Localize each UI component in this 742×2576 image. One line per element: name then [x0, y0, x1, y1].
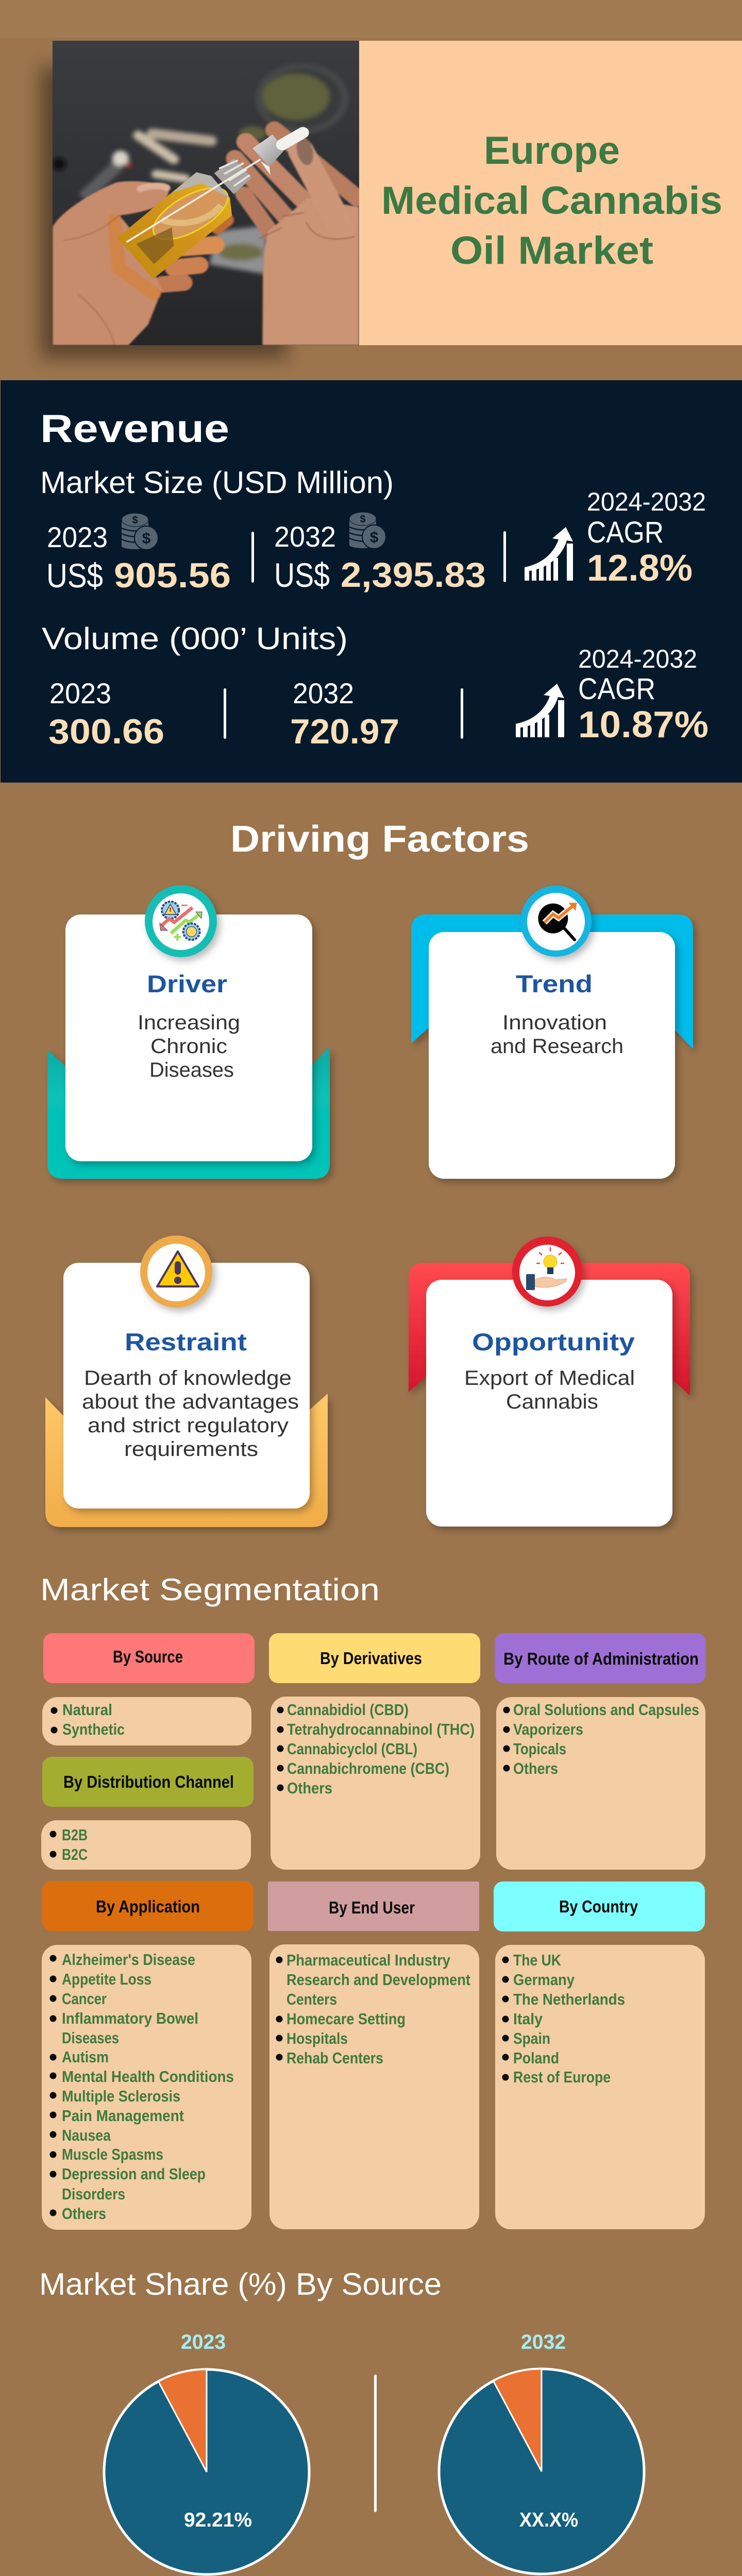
driver text: Chronic — [150, 1035, 227, 1058]
icon: growth chart 2 — [516, 684, 564, 737]
2032 volume: 2032 — [293, 677, 354, 709]
icon: coins 2023: $ — [132, 515, 138, 526]
segmentation: by application: Diseases — [62, 2029, 119, 2047]
icon: driver — [145, 885, 217, 957]
bottle fingers below — [180, 245, 215, 248]
2023 market size: US$ — [46, 556, 103, 595]
segmentation: by application: Disorders — [62, 2185, 125, 2203]
panel: driver — [47, 885, 330, 1179]
chart: source 2032 pie: 2032 — [521, 2331, 566, 2353]
2023 market size: 905.56 — [114, 556, 231, 595]
icon: coins 2032: $ — [360, 514, 366, 525]
icon: opportunity — [512, 1236, 582, 1307]
chart: source 2032 pie: XX.X% — [519, 2509, 578, 2531]
segmentation: by country: Germany — [513, 1971, 575, 1989]
trend title: Trend — [516, 970, 593, 997]
2032 market size: 2032 — [274, 520, 336, 553]
segmentation: by derivatives — [269, 1633, 480, 1870]
segmentation: by application: Depression and Sleep — [62, 2165, 206, 2183]
segmentation: by source — [42, 1633, 255, 1745]
segmentation: by application: Nausea — [62, 2126, 111, 2144]
segmentation: by end user: Hospitals — [286, 2029, 348, 2047]
segmentation: by derivatives: Tetrahydrocannabinol (THC) — [287, 1720, 475, 1738]
CAGR 1: CAGR — [587, 516, 664, 549]
segmentation: by source: Natural — [62, 1701, 112, 1719]
title panel — [359, 41, 742, 345]
segmentation: by country: Rest of Europe — [513, 2068, 611, 2086]
segmentation: by application — [42, 1881, 254, 2230]
heading: volume: Volume (000’ Units) — [42, 621, 348, 656]
trend text — [491, 1011, 623, 1058]
chart: source 2023 pie: 92.21% — [184, 2509, 252, 2531]
segmentation: by distribution channel: By Distribution Channel — [63, 1772, 234, 1791]
2032 market size — [274, 520, 486, 595]
segmentation: by country — [494, 1882, 705, 2229]
segmentation: by route of administration: Oral Solutions and Capsules — [513, 1701, 699, 1719]
restraint text: Dearth of knowledge — [84, 1367, 292, 1389]
restraint title: Restraint — [125, 1328, 247, 1355]
segmentation: by country: Poland — [513, 2049, 559, 2067]
segmentation: by application: Autism — [62, 2048, 109, 2066]
segmentation: by derivatives: Cannabidiol (CBD) — [287, 1701, 409, 1719]
segmentation: by end user: By End User — [329, 1898, 415, 1917]
icon: coins 2032 — [349, 512, 386, 549]
segmentation: by route of administration: Vaporizers — [513, 1720, 583, 1738]
title: Europe — [484, 129, 620, 173]
segmentation: by end user: Centers — [286, 1990, 337, 2008]
2032 volume: 720.97 — [290, 712, 399, 751]
segmentation: by route of administration: Topicals — [513, 1740, 566, 1758]
driver title: Driver — [147, 970, 227, 997]
segmentation: by derivatives: By Derivatives — [320, 1649, 422, 1668]
CAGR 1: 2024-2032 — [587, 487, 706, 516]
heading: driving factors: Driving Factors — [230, 819, 529, 860]
panel: restraint — [45, 1235, 328, 1527]
segmentation: by country: Spain — [513, 2029, 550, 2047]
heading: revenue: Revenue — [40, 407, 229, 451]
chart: source 2032 pie — [439, 2331, 644, 2574]
segmentation: by application: Pain Management — [62, 2107, 184, 2125]
restraint text: about the advantages — [82, 1391, 299, 1413]
CAGR 1: 12.8% — [587, 548, 693, 589]
segmentation: by derivatives: Others — [287, 1779, 332, 1797]
restraint text — [82, 1367, 299, 1461]
segmentation: by end user: Pharmaceutical Industry — [286, 1951, 451, 1969]
hero banner — [40, 41, 742, 358]
icon: coins 2023: $ — [142, 530, 151, 547]
segmentation: by application: Inflammatory Bowel — [62, 2009, 198, 2027]
segmentation: by route of administration: By Route of Administration — [503, 1649, 699, 1668]
2032 market size: 2,395.83 — [341, 555, 486, 595]
segmentation: by application: Cancer — [62, 1990, 107, 2008]
segmentation: by source: Synthetic — [62, 1720, 125, 1738]
segmentation: by distribution channel — [41, 1757, 254, 1870]
segmentation: by distribution channel: B2C — [62, 1845, 88, 1863]
panel: opportunity — [409, 1236, 690, 1527]
2023 market size: 2023 — [47, 521, 108, 553]
segmentation: by country: The Netherlands — [513, 1990, 625, 2008]
segmentation: by application: By Application — [96, 1897, 200, 1916]
icon: growth chart 1 — [525, 527, 573, 581]
segmentation: by route of administration: Others — [513, 1759, 558, 1777]
driver text: Increasing — [138, 1011, 240, 1034]
heading: market segmentation: Market Segmentation — [40, 1572, 380, 1607]
trend text: and Research — [491, 1035, 623, 1058]
2032 market size: US$ — [274, 556, 330, 594]
segmentation: by application: Others — [62, 2205, 106, 2223]
panel: trend — [411, 886, 693, 1179]
segmentation: by country: Italy — [513, 2010, 543, 2028]
trend text: Innovation — [502, 1011, 607, 1034]
heading: market size: Market Size (USD Million) — [40, 465, 394, 500]
opportunity text: Export of Medical — [464, 1367, 635, 1389]
CAGR 2: CAGR — [578, 672, 655, 706]
opportunity text: Cannabis — [506, 1391, 598, 1413]
title — [381, 129, 722, 273]
photo shadow — [40, 67, 288, 358]
restraint text: and strict regulatory — [88, 1414, 289, 1437]
segmentation: by application: Muscle Spasms — [62, 2145, 163, 2163]
segmentation: by application: Appetite Loss — [62, 1970, 151, 1988]
segmentation: by country: The UK — [513, 1951, 562, 1969]
chart: source 2023 pie — [104, 2331, 309, 2574]
title: Oil Market — [450, 229, 653, 273]
chart: source 2023 pie: 2023 — [181, 2331, 226, 2353]
segmentation: by derivatives: Cannabichromene (CBC) — [287, 1759, 449, 1777]
segmentation: by application: Mental Health Conditions — [62, 2067, 234, 2086]
right hand — [274, 130, 357, 198]
dropper — [252, 134, 285, 167]
icon: coins 2023 — [122, 513, 158, 550]
2023 volume: 2023 — [49, 677, 111, 709]
title: Medical Cannabis — [381, 179, 722, 223]
CAGR 2 — [578, 645, 709, 745]
left hand — [53, 181, 168, 345]
driver text: Diseases — [149, 1059, 234, 1081]
segmentation: by source: By Source — [113, 1647, 183, 1666]
restraint text: requirements — [124, 1438, 258, 1461]
CAGR 2: 2024-2032 — [578, 645, 697, 673]
2032 volume — [290, 677, 399, 751]
panel: revenue — [1, 380, 742, 783]
bottle — [117, 172, 232, 279]
segmentation: by end user — [268, 1882, 479, 2229]
CAGR 2: 10.87% — [578, 704, 709, 745]
2023 volume: 300.66 — [48, 712, 164, 751]
segmentation: by end user: Rehab Centers — [286, 2049, 383, 2067]
segmentation: by end user: Homecare Setting — [286, 2010, 406, 2028]
segmentation: by route of administration — [495, 1633, 706, 1870]
opportunity title: Opportunity — [472, 1328, 635, 1355]
opportunity text — [464, 1367, 635, 1413]
segmentation: by derivatives: Cannabicyclol (CBL) — [287, 1740, 417, 1758]
hero photo: hands holding oil dropper bottle — [53, 41, 359, 345]
driver text — [138, 1011, 240, 1081]
heading: market share by source: Market Share (%) By Source — [39, 2267, 442, 2301]
segmentation: by country: By Country — [559, 1897, 638, 1916]
segmentation: by application: Multiple Sclerosis — [62, 2087, 180, 2105]
icon: restraint — [140, 1235, 212, 1308]
icon: trend — [520, 886, 592, 957]
segmentation: by end user: Research and Development — [286, 1971, 470, 1989]
icon: coins 2032: $ — [370, 529, 379, 546]
2023 market size — [46, 521, 231, 595]
segmentation: by application: Alzheimer's Disease — [62, 1951, 195, 1969]
segmentation: by distribution channel: B2B — [62, 1826, 88, 1844]
2023 volume — [48, 677, 164, 751]
CAGR 1 — [587, 487, 706, 589]
